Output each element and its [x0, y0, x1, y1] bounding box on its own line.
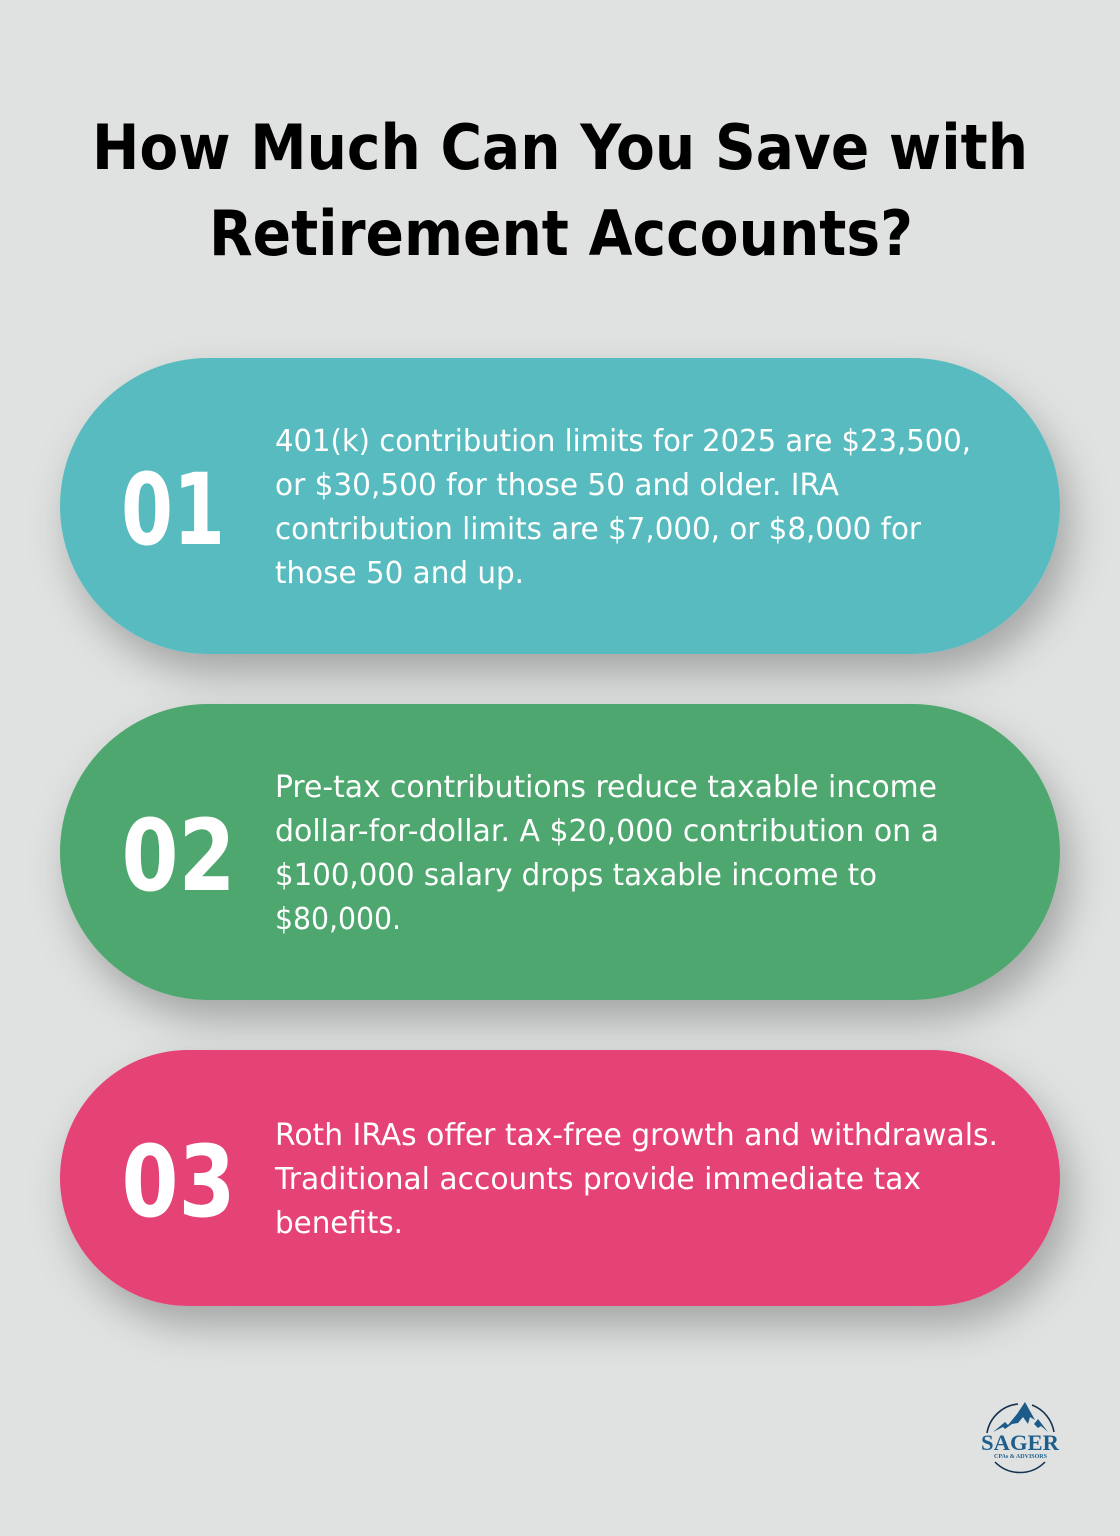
- text: step 02 body: dollar-for-dollar. A $20,000 contribution on a: [275, 814, 939, 849]
- text: step 02 body: $100,000 salary drops taxable income to: [275, 858, 877, 893]
- pill: step 02 background: [60, 704, 1060, 1000]
- pill: step 01 background: [60, 358, 1060, 654]
- title: How Much Can You Save with: [92, 111, 1028, 184]
- text: step 01 body: or $30,500 for those 50 and older. IRA: [275, 468, 839, 503]
- text: step 03 body: Traditional accounts provide immediate tax: [274, 1162, 921, 1197]
- text: step 02 body: $80,000.: [275, 902, 401, 937]
- text: step 01 body: contribution limits are $7,000, or $8,000 for: [275, 512, 921, 547]
- icon: mountain: [993, 1402, 1048, 1432]
- text: step 01 body: those 50 and up.: [275, 556, 524, 591]
- number: 01: 01: [121, 453, 225, 568]
- panel: step 01: [60, 358, 1060, 654]
- icon: circle arcs: [987, 1404, 1054, 1473]
- text: step 03 body: benefits.: [275, 1206, 403, 1241]
- text: step 02 body: [275, 770, 939, 937]
- number: 03: 03: [122, 1125, 236, 1240]
- pill: step 03 background: [60, 1050, 1060, 1306]
- text: step 02 body: Pre-tax contributions reduce taxable income: [275, 770, 937, 805]
- panel: step 02: [60, 704, 1060, 1000]
- title: [92, 111, 1028, 270]
- text: CPAs & ADVISORS: CPAs & ADVISORS: [994, 1454, 1048, 1460]
- panel: step 03: [60, 1050, 1060, 1306]
- logo: Sager CPAs & Advisors: [981, 1402, 1060, 1473]
- number: 02: 02: [122, 799, 236, 914]
- text: step 01 body: [275, 424, 971, 591]
- text: SAGER: SAGER: [981, 1430, 1060, 1455]
- text: step 03 body: Roth IRAs offer tax-free growth and withdrawals.: [275, 1118, 998, 1153]
- text: step 01 body: 401(k) contribution limits for 2025 are $23,500,: [275, 424, 971, 459]
- text: step 03 body: [274, 1118, 998, 1241]
- title: Retirement Accounts?: [209, 197, 913, 270]
